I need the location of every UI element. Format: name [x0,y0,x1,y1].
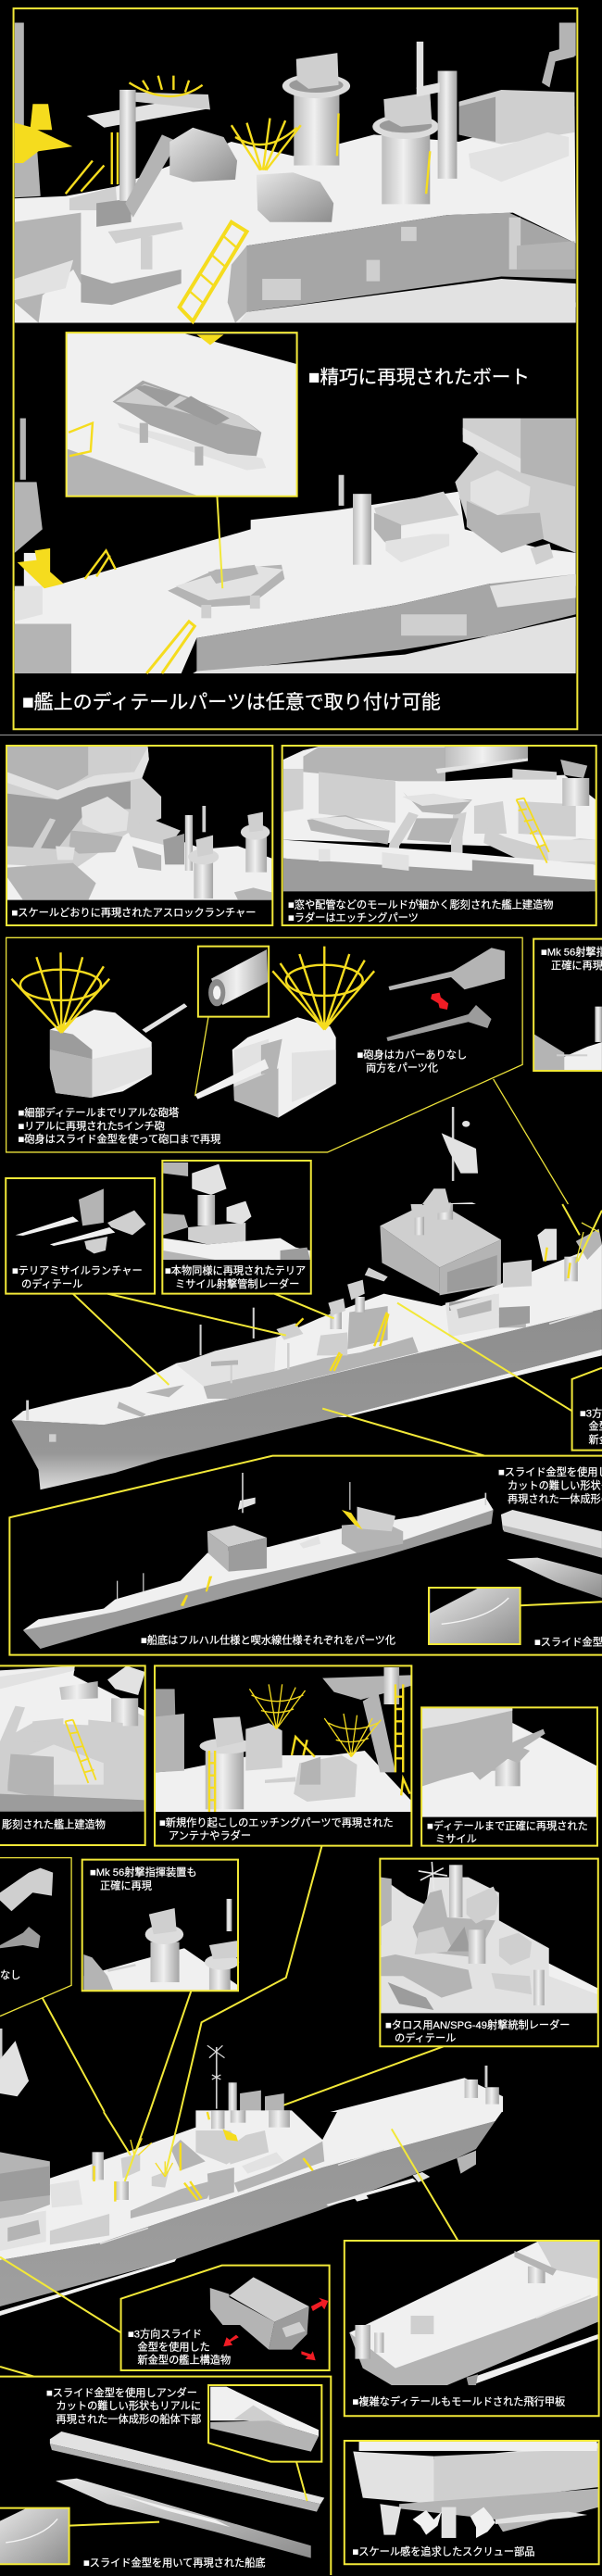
captions: lower strip one: ■本物同様に再現されたテリア [165,1263,306,1276]
panel: flight deck [345,2241,599,2416]
panel: Mk 56 director (right edge) [533,939,602,1071]
waterline hull part edge [501,1510,602,1558]
photo: deck with boat [15,419,576,673]
panel: superstructure (continued) [0,1665,145,1845]
captions: upper strip one: ■スケールどおりに再現されたアスロックランチャー [11,907,256,919]
leader lines: strip two [43,1846,444,2112]
captions: upper strip one: ■砲身はスライド金型を使って砲口まで再現 [19,1132,220,1145]
frame [14,8,577,729]
captions: upper strip one [11,898,602,1145]
captions: lower strip one: ■船底はフルハル仕様と喫水線仕様それぞれをパーツ化 [141,1634,395,1647]
panel: superstructure windows and piping [282,746,596,925]
panel: top boat and deck detail [14,8,577,729]
captions: lower strip two: ■スライド金型を用いて再現された船底 [83,2557,266,2570]
lower hull part edge [507,1558,602,1598]
panel: Mk 56 director [82,1860,239,1991]
panel: ASROC launcher [6,746,272,925]
leader line: mold inset [520,1602,602,1605]
upper hull part [50,2431,324,2504]
inset: bow detail [208,2385,321,2462]
captions: lower strip two: 再現された一体成形の船体下部 [56,2412,201,2425]
inset: gun muzzle [198,947,269,1017]
panel: full hull and waterline hull [9,1456,602,1655]
captions: upper strip one: ■細部ディテールまでリアルな砲塔 [19,1106,179,1119]
small full ship [23,1473,494,1649]
main ship aft mast [0,2029,503,2112]
captions: upper strip two: 正確に再現 [100,1880,152,1891]
captions: lower strip two: カットの難しい形状もリアルに [56,2399,201,2412]
caption: boat: ■精巧に再現されたボート [308,367,530,388]
photo: superstructure close-up with directors [15,22,576,322]
caption: deck parts: ■艦上のディテールパーツは任意で取り付け可能 [22,692,441,713]
captions: lower strip two: 新金型の艦上構造物 [137,2353,231,2366]
captions: upper strip two: なし [0,1969,20,1981]
panel: Talos AN/SPG-49 radar [380,1859,598,2046]
strip two: ship and hull panels [0,2110,599,2575]
leader line: main ship to turret panel [494,1079,568,1204]
inset: slide mold surface [429,1588,520,1644]
captions: upper strip one: ■砲身はカバーありなし [357,1049,467,1062]
panel: five inch gun turrets [6,937,522,1152]
captions: lower strip two: ■3方向スライド [128,2327,202,2340]
captions: lower strip two: ■スライド金型を使用しアンダー [46,2386,197,2399]
panel: Terrier fire control radar [162,1161,311,1294]
captions: upper strip two: 彫刻された艦上建造物 [2,1817,106,1830]
panel: screw and rudder [345,2441,599,2564]
panel group: strip one upper details [6,746,602,1204]
leader line: mold inset [69,2522,159,2526]
leader lines: ship details [0,2112,458,2377]
panel: Terrier missile launcher [6,1178,155,1294]
captions: upper strip two: ■Mk 56射撃指揮装置も [90,1866,197,1879]
leader line: muzzle [195,1017,208,1096]
strip two: upper details [0,1665,598,2112]
panel: three direction slide mold [121,2266,330,2370]
captions: lower strip one: ■テリアミサイルランチャー [12,1265,143,1276]
captions: upper strip two: ミサイル [435,1833,477,1845]
panel: turret (continued) [0,1858,71,2017]
inset: boat close-up [67,333,297,496]
captions: upper strip one: 両方をパーツ化 [366,1062,438,1074]
captions: lower strip two: ■複雑なディテールもモールドされた飛行甲板 [352,2395,565,2408]
lower hull part [56,2479,311,2558]
captions: upper strip two: アンテナやラダー [169,1828,251,1841]
captions: upper strip one: ■リアルに再現された5インチ砲 [19,1121,165,1132]
turret right with antenna [195,947,374,1118]
gun barrel parts with arrow [386,948,505,1041]
captions: lower strip one [12,1263,602,1649]
strip one: ship and hull panels [6,1161,602,1655]
main ship aft [0,2110,503,2316]
leader line: boat [217,496,222,588]
captions: lower strip two: ■スケール感を追求したスクリュー部品 [352,2545,534,2558]
etched antenna and ladders in yellow [15,76,430,321]
leader line: bow inset [296,2462,307,2501]
captions: lower strip two: 金型を使用した [137,2340,210,2353]
captions: lower strip one: ミサイル射撃管制レーダー [175,1277,299,1290]
inset: slide mold surface (continued) [0,2508,69,2564]
main ship mast [422,1107,478,1204]
turret left with antenna [11,952,187,1098]
captions: upper strip one: ■ラダーはエッチングパーツ [288,911,419,924]
panel: etched antenna and ladder [155,1665,411,1846]
panel: slide mold 3-way (edge) [572,1368,602,1451]
captions: upper strip two: ■新規作り起こしのエッチングパーツで再現された [159,1816,394,1828]
panel: missile detail [421,1707,597,1846]
captions: upper strip two: ■ディテールまで正確に再現された [427,1819,588,1832]
captions: upper strip two: ■タロス用AN/SPG-49射撃統制レーダー [385,2018,570,2031]
captions: upper strip one: ■窓や配管などのモールドが細かく彫刻された艦上建造物 [288,898,553,911]
captions: upper strip two: のディテール [395,2031,456,2044]
captions: upper strip one: 正確に再現 [551,960,602,972]
main ship [11,1200,602,1489]
captions: lower strip two [46,2327,565,2570]
captions: upper strip two [0,1816,588,2044]
captions: lower strip one: のディテール [21,1277,82,1290]
leader lines: ship to detail panels [73,1204,602,1456]
panel: slide mold hull parts [0,2377,331,2575]
